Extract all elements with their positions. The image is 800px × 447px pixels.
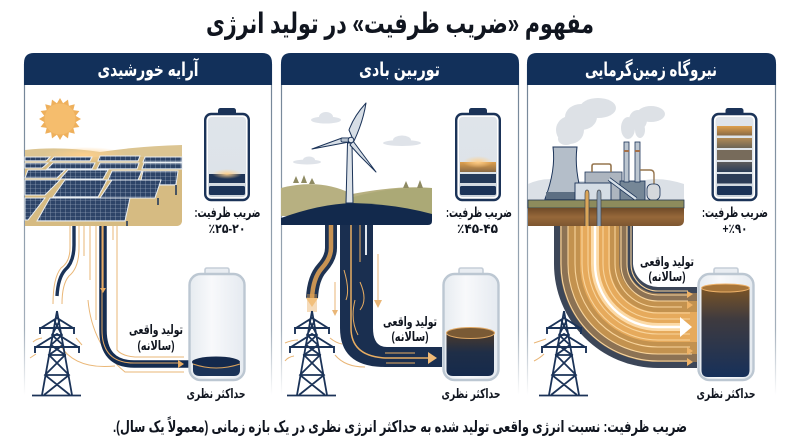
panel: solar array <box>24 53 272 401</box>
label: theoretical max wind: حداکثر نظری <box>442 386 500 401</box>
label: actual output solar: (سالانه) <box>138 338 174 353</box>
panel header: solar: آرایه خورشیدی <box>98 57 199 81</box>
panel header: wind <box>281 53 519 85</box>
icon: geothermal tower <box>539 311 588 396</box>
capacity label: geothermal: +٪۹۰ <box>722 221 748 236</box>
solar panels <box>25 156 182 221</box>
icon: wind tower <box>287 311 336 396</box>
capacity label: geothermal <box>702 205 768 236</box>
label: actual output geothermal: (سالانه) <box>648 269 686 284</box>
icon: sun <box>39 98 81 140</box>
icon: capacity battery geothermal <box>713 108 756 200</box>
panel header: geothermal <box>527 53 776 85</box>
capacity label: solar: ضریب ظرفیت: <box>194 205 260 220</box>
icon: theoretical battery geothermal <box>698 268 754 380</box>
label: actual output wind: (سالانه) <box>392 329 428 344</box>
icon: theoretical battery wind <box>444 268 498 380</box>
image: solar field <box>25 98 182 226</box>
panel: geothermal <box>527 53 776 401</box>
label: actual output wind <box>383 314 437 344</box>
label: actual output wind: تولید واقعی <box>383 314 437 329</box>
ground layers <box>528 200 684 208</box>
label: actual output solar <box>129 322 183 353</box>
label: actual output geothermal <box>640 254 694 284</box>
energy flow: wind <box>285 225 442 367</box>
panel header: solar <box>24 53 272 85</box>
panel: wind turbine <box>281 53 519 401</box>
panel header: wind: توربین بادی <box>359 60 440 81</box>
well pipes <box>585 190 589 226</box>
label: theoretical max solar: حداکثر نظری <box>186 386 246 401</box>
label: actual output geothermal: تولید واقعی <box>640 254 694 269</box>
energy flow: solar <box>30 226 190 372</box>
icon: capacity battery solar <box>205 108 249 200</box>
capacity label: solar <box>194 205 260 236</box>
capacity label: geothermal: ضریب ظرفیت: <box>702 205 768 220</box>
clouds <box>293 112 421 164</box>
image: wind turbine <box>281 103 432 225</box>
panel header: geothermal: نیروگاه زمین‌گرمایی <box>585 58 717 81</box>
energy flow: geothermal <box>534 226 697 368</box>
icon: solar tower <box>32 311 81 396</box>
turbine <box>312 103 376 203</box>
capacity label: wind: ٪۴۵-۴۵ <box>457 221 498 236</box>
icon: theoretical battery solar <box>190 268 244 380</box>
capacity label: wind <box>446 205 512 236</box>
image: geothermal plant <box>528 98 684 226</box>
cooling tower <box>545 147 583 199</box>
capacity label: wind: ضریب ظرفیت: <box>446 205 512 220</box>
label: theoretical max geothermal: حداکثر نظری <box>696 386 756 401</box>
icon: capacity battery wind <box>456 108 500 200</box>
label: actual output solar: تولید واقعی <box>129 322 183 337</box>
steam clouds <box>556 98 665 145</box>
plant buildings <box>585 172 622 200</box>
title: مفهوم «ضریب ظرفیت» در تولید انرژی <box>206 8 594 40</box>
capacity label: solar: ٪۲۵-۲۰ <box>208 221 246 236</box>
